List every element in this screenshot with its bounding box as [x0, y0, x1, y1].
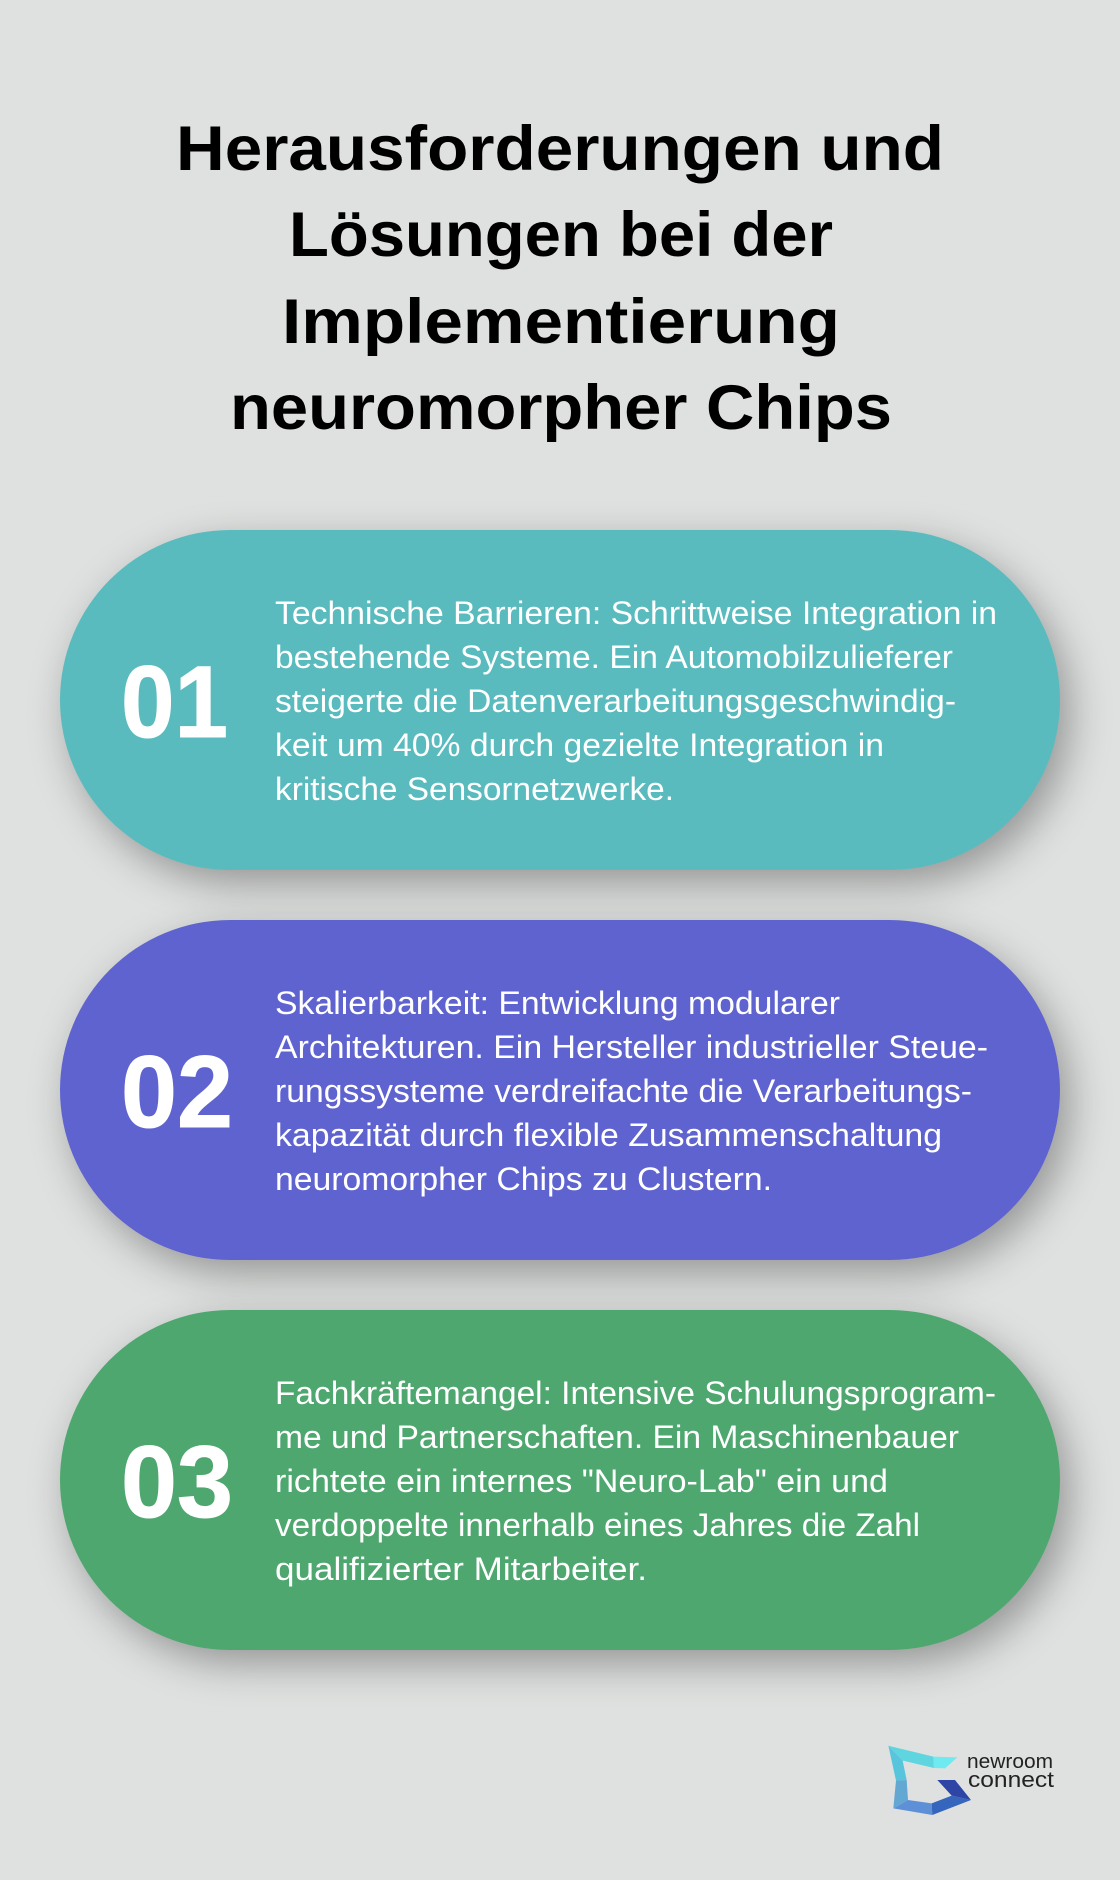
text block 02: Architekturen. Ein Hersteller industrieller Steue-	[275, 1029, 988, 1065]
pill background teal	[60, 530, 1060, 870]
text block 01: bestehende Systeme. Ein Automobilzulieferer	[275, 639, 953, 675]
logo wordmark	[967, 1751, 1054, 1792]
logo wordmark: connect	[968, 1767, 1054, 1792]
text block 03: richtete ein internes "Neuro-Lab" ein und	[275, 1463, 888, 1499]
text block 02: neuromorpher Chips zu Clustern.	[275, 1161, 772, 1197]
text block 02	[275, 985, 988, 1197]
pill background purple	[60, 920, 1060, 1260]
pill background green	[60, 1310, 1060, 1650]
text block 01	[275, 595, 997, 807]
number 01: 01	[121, 645, 228, 759]
panel: step 02 scalability	[60, 920, 1060, 1260]
text block 01: steigerte die Datenverarbeitungsgeschwindig-	[275, 683, 956, 719]
text block 03: qualifizierter Mitarbeiter.	[275, 1551, 647, 1587]
panel: step 03 skills shortage	[60, 1310, 1060, 1650]
title: neuromorpher Chips	[230, 373, 892, 443]
logo wordmark: newroom	[967, 1751, 1053, 1773]
text block 01: Technische Barrieren: Schrittweise Integration in	[275, 595, 997, 631]
text block 03	[275, 1375, 996, 1587]
panel: step 01 technical barriers	[60, 530, 1060, 870]
text block 01: kritische Sensornetzwerke.	[275, 771, 674, 807]
text block 02: kapazität durch flexible Zusammenschaltung	[275, 1117, 942, 1153]
title: Lösungen bei der	[289, 200, 833, 270]
text block 02: Skalierbarkeit: Entwicklung modularer	[275, 985, 840, 1021]
logo: newroom connect	[888, 1746, 1054, 1815]
text block 03: Fachkräftemangel: Intensive Schulungsprogram-	[275, 1375, 996, 1411]
icon: logo mark	[888, 1746, 971, 1815]
title: Herausforderungen und	[176, 114, 944, 184]
text block 01: keit um 40% durch gezielte Integration in	[275, 727, 884, 763]
number 02: 02	[121, 1035, 233, 1149]
number 03: 03	[121, 1425, 233, 1539]
title: Implementierung	[282, 287, 840, 357]
text block 03: verdoppelte innerhalb eines Jahres die Zahl	[275, 1507, 920, 1543]
text block 03: me und Partnerschaften. Ein Maschinenbauer	[275, 1419, 959, 1455]
title	[176, 114, 944, 443]
text block 02: rungssysteme verdreifachte die Verarbeitungs-	[275, 1073, 972, 1109]
